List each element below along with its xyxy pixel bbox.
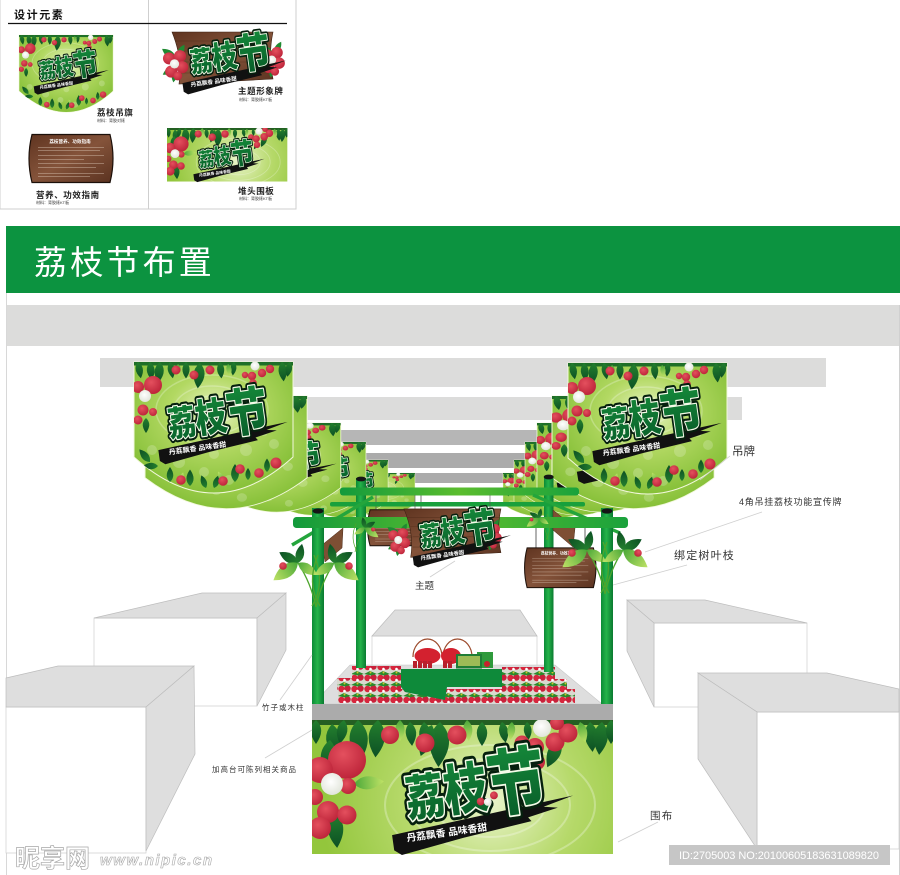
- spray: right inner: [559, 530, 609, 594]
- title band: 荔枝节布置: [34, 244, 215, 281]
- diagonal struts: [292, 495, 620, 545]
- element: lychee hanging flag: 节: [71, 46, 100, 83]
- panel: design elements: [0, 0, 296, 209]
- hanging flags: left row, back to front: 荔枝节: [281, 455, 352, 489]
- hanging flags: left row, back to front: 荔枝节: [316, 470, 376, 498]
- watermark: site logo: [15, 845, 212, 873]
- front skirt panel: 丹荔飘香 品味香甜: [406, 820, 488, 844]
- leaf sprays on front posts: [270, 530, 651, 607]
- element: display board: 丹荔飘香 品味香甜: [199, 168, 231, 178]
- store shelf: upper left: [94, 593, 286, 706]
- element: nutrition guide sign: 营养、功效指南: [36, 190, 100, 200]
- hanging flag: front left: 丹荔飘香 品味香甜: [168, 440, 227, 457]
- hanging flag: front right: 节: [657, 383, 706, 445]
- element: display board: 荔枝: [197, 144, 233, 171]
- callout: hanging flag: [700, 444, 755, 480]
- hanging flags: left row, back to front: 荔枝节: [236, 439, 324, 481]
- element: lychee hanging flag: 丹荔飘香 品味香甜: [39, 79, 73, 90]
- hanging flags: left row, back to front: 荔枝节: [316, 470, 376, 498]
- store shelf: upper right: [627, 600, 807, 707]
- front skirt panel: 荔枝: [402, 756, 492, 828]
- front skirt panel: 节: [482, 739, 551, 827]
- element: lychee hanging flag: 荔枝吊旗: [97, 108, 133, 118]
- hanging flag: front right: 节: [657, 383, 706, 445]
- hanging flags: left row, back to front: 荔枝节: [281, 455, 352, 489]
- watermark: image id: [669, 845, 890, 865]
- callout: raised platform: 加高台可陈列相关商品: [212, 764, 297, 774]
- element: display board: 堆头围板: [238, 186, 274, 196]
- hanging flag: front left: 节: [223, 382, 272, 444]
- hanging flag: front left: [132, 361, 294, 493]
- callout: theme: 主题: [415, 580, 435, 592]
- element: theme sign: 节: [234, 28, 273, 78]
- element: display board: 节: [229, 137, 256, 172]
- hanging flag: front left: 荔枝: [165, 394, 230, 445]
- back posts: [356, 475, 554, 672]
- callout: corner hanging signs: [645, 496, 842, 552]
- watermark: image id: ID:2705003 NO:20100605183631089820: [679, 850, 879, 862]
- front skirt panel: [307, 716, 616, 865]
- element: theme sign: 主题形象牌: [238, 86, 284, 96]
- hanging flag: front left: 荔枝: [165, 394, 230, 445]
- callout: hanging flag: 吊牌: [732, 444, 755, 458]
- element: nutrition guide sign: 荔枝营养、功效指南: [49, 138, 91, 145]
- grey raised platform strip: [312, 704, 613, 720]
- front skirt panel: 节: [482, 739, 551, 827]
- element: display board: 材料：背胶裱KT板: [239, 195, 272, 201]
- floor platform with lychee display: [313, 639, 602, 704]
- spray: right outer: [601, 530, 651, 594]
- element: lychee hanging flag: 节: [71, 46, 100, 83]
- watermark: site logo: www.nipic.cn: [100, 852, 212, 869]
- element: theme sign: [160, 26, 289, 102]
- element: display board: 荔枝: [197, 144, 233, 171]
- element: nutrition guide sign: 材料：背胶裱KT板: [36, 199, 69, 205]
- element: lychee hanging flag: 荔枝: [38, 54, 75, 83]
- spray: left inner: [312, 543, 362, 607]
- hanging nutrition sign: 荔枝营养、功效指南: [541, 550, 575, 556]
- callout: bamboo or wooden post: 竹子或木柱: [262, 702, 304, 712]
- ceiling beams: [100, 358, 826, 483]
- theme sign on stand: 节: [462, 505, 499, 553]
- element: lychee hanging flag: 荔枝: [38, 54, 75, 83]
- bamboo stand: [292, 475, 628, 704]
- callout: raised platform: [212, 730, 312, 774]
- theme sign on stand: 节: [462, 505, 499, 553]
- hanging flags: left row, back to front: 荔枝节: [236, 439, 324, 481]
- hanging flag: front right: 丹荔飘香 品味香甜: [602, 441, 661, 458]
- back sign, partly hidden: [368, 495, 439, 546]
- hanging flags: left row, back to front: [143, 395, 415, 518]
- side sign pieces: [322, 510, 575, 562]
- spray: left outer: [270, 543, 320, 607]
- store shelf: lower left: [6, 666, 195, 853]
- element: theme sign: 材料：背胶裱KT板: [239, 96, 272, 102]
- theme sign on stand: [386, 495, 514, 568]
- back table: [372, 610, 537, 666]
- callout: skirt cloth: 围布: [650, 810, 673, 822]
- front beam: [293, 517, 628, 528]
- hanging flags: right row, back to front: [502, 395, 715, 518]
- callout: bamboo or wooden post: [262, 655, 312, 712]
- element: display board: 节: [229, 137, 256, 172]
- element: theme sign: 荔枝: [188, 39, 240, 79]
- front skirt panel: 荔枝: [402, 756, 492, 828]
- hanging flag: front left: 节: [223, 382, 272, 444]
- element: theme sign: 丹荔飘香 品味香甜: [190, 74, 238, 89]
- green display stand: [401, 669, 502, 700]
- front posts: [312, 508, 613, 704]
- callout: theme: [415, 561, 455, 592]
- theme sign on stand: 荔枝: [418, 514, 467, 553]
- element: lychee hanging flag: 材料：背胶对裱: [97, 117, 125, 123]
- theme sign on stand: 丹荔飘香 品味香甜: [420, 548, 465, 562]
- heading: design elements: 设计元素: [14, 8, 64, 22]
- baskets of lychees: [413, 639, 472, 668]
- store shelf: lower right: [698, 673, 899, 849]
- title band: [6, 226, 900, 293]
- hanging flag: front right: 荔枝: [599, 395, 664, 446]
- element: display board: [165, 126, 289, 201]
- callout: corner hanging signs: 4角吊挂荔枝功能宣传牌: [739, 496, 842, 507]
- hanging flag: front right: 荔枝: [599, 395, 664, 446]
- callout: skirt cloth: [618, 810, 673, 842]
- lychee rows: [337, 666, 575, 703]
- theme sign on stand: 荔枝: [418, 514, 467, 553]
- element: nutrition guide sign: [29, 134, 113, 205]
- callout: leaf branches: 绑定树叶枝: [674, 548, 735, 562]
- callout: leaf branches: [613, 548, 735, 585]
- element: theme sign: 节: [234, 28, 273, 78]
- small leaf sprays on back posts: [353, 508, 550, 552]
- watermark: site logo: 昵享网: [15, 845, 90, 873]
- element: lychee hanging flag: [18, 35, 133, 123]
- scene frame: ceiling band and borders: [6, 293, 900, 875]
- back beams: [330, 488, 585, 506]
- hanging flag: front right: [566, 362, 728, 494]
- hanging nutrition sign: [525, 528, 596, 588]
- element: theme sign: 荔枝: [188, 39, 240, 79]
- gift boxes: [456, 652, 493, 668]
